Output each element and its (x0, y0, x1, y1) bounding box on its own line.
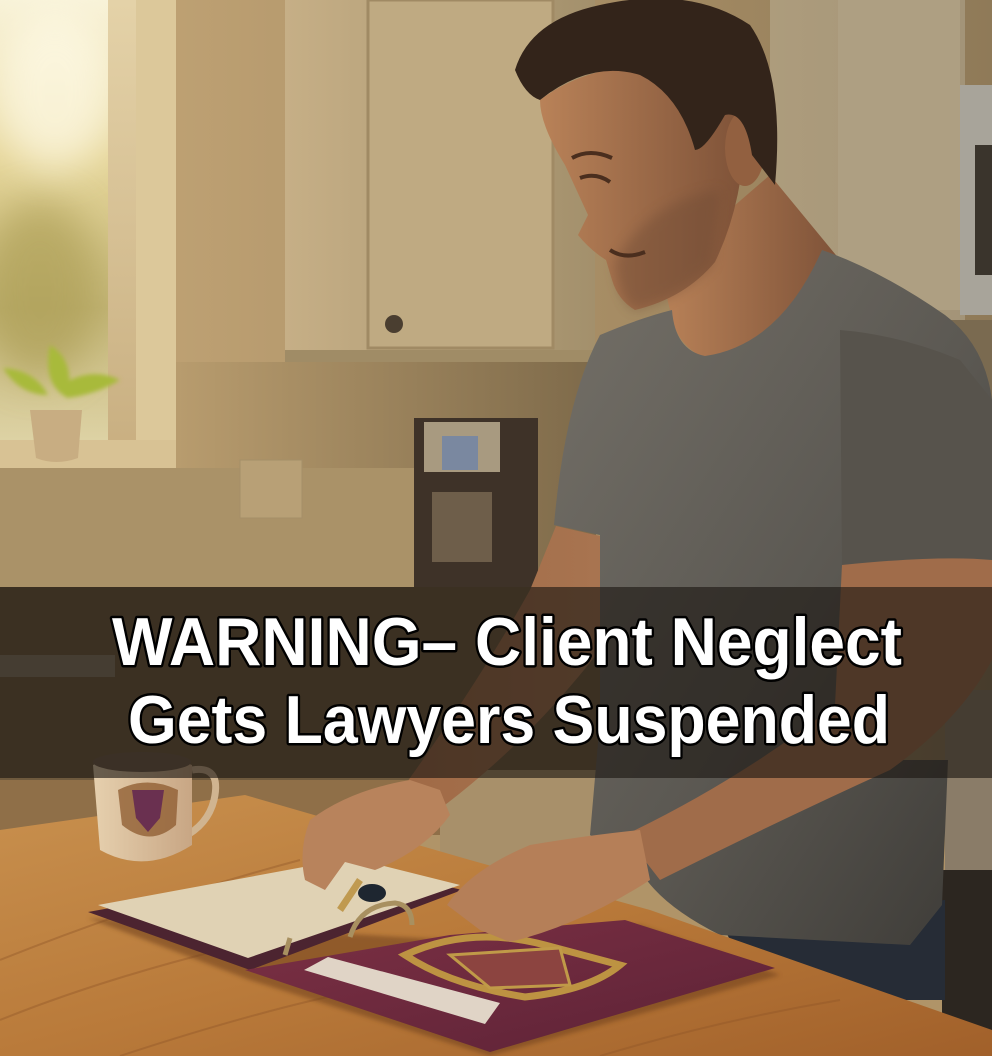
coffee maker (414, 418, 538, 588)
man: ear (725, 110, 765, 186)
man: right hand (447, 830, 650, 942)
binder: white label (304, 957, 500, 1024)
coffee mug with crest (93, 752, 216, 861)
man: jeans (720, 900, 945, 1000)
right cabinets and appliance (770, 0, 992, 600)
man: left arm (405, 526, 600, 805)
man: eye and mouth (572, 153, 645, 256)
binder: maroon cover (245, 920, 775, 1052)
binder (88, 858, 780, 1056)
man torso and head (515, 0, 992, 1000)
binder: shadow (88, 918, 780, 1056)
wall outlet (240, 460, 302, 518)
upper kitchen cabinet (285, 0, 595, 362)
wooden counter (0, 795, 992, 1056)
man: right arm (625, 558, 992, 880)
man: shirt (554, 250, 992, 945)
man: neck (660, 175, 840, 358)
window with frame and sunlight (0, 0, 176, 468)
binder: keys (340, 880, 360, 910)
binder: metal rings (285, 903, 412, 955)
binder: left page stack (88, 864, 462, 970)
plant in pot on the windowsill (3, 345, 120, 462)
dark banner strip (0, 587, 992, 778)
man: hair (515, 0, 777, 185)
man: left hand (302, 780, 450, 890)
man: face (540, 66, 745, 310)
headline line 1: WARNING– Client Neglect (112, 604, 902, 680)
kitchen wall background (0, 0, 992, 800)
binder: gold emblem (405, 937, 620, 997)
headline (112, 604, 902, 758)
man arms and hands (302, 526, 992, 942)
headline line 2: Gets Lawyers Suspended (128, 682, 890, 758)
dim lower kitchen behind banner (0, 587, 992, 1040)
